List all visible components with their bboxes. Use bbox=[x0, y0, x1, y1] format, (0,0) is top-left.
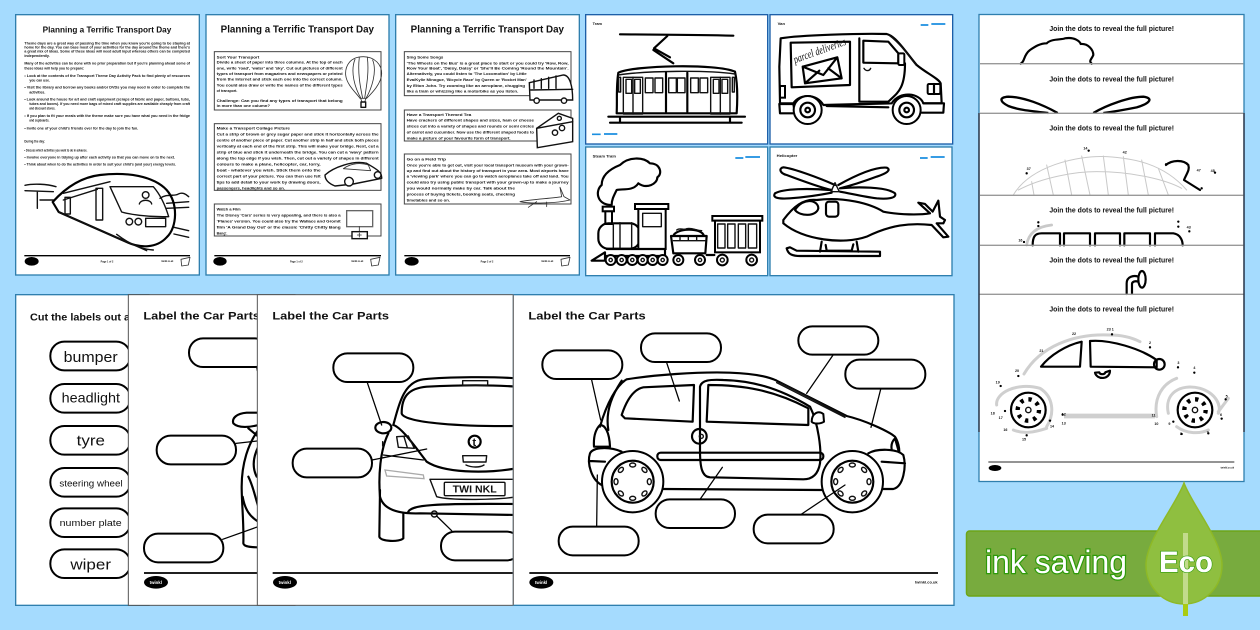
label: tram: Tram bbox=[593, 22, 603, 26]
heading: label the car parts: Label the Car Parts bbox=[272, 310, 389, 322]
footer: page b bbox=[144, 573, 263, 589]
panel: steam train colouring sheet bbox=[586, 147, 768, 276]
label: helicopter: Helicopter bbox=[777, 154, 798, 158]
dots and numbers: 13 bbox=[1062, 422, 1066, 426]
strip: balloon dots: 47 bbox=[1197, 169, 1201, 173]
dots and numbers: 12 bbox=[1062, 413, 1066, 417]
label pill: wiper bbox=[50, 549, 130, 578]
text block: page 1 introduction: • Look around the house for art and craft equipment (scraps of fabric and paper, buttons, tubs, bbox=[24, 97, 190, 102]
box: have a transport themed tea: Have crackers of different shapes and sizes, ham or cheese bbox=[407, 118, 535, 123]
page 2 footer bbox=[213, 256, 381, 266]
icon: cheese wedge bbox=[537, 113, 573, 148]
label pill: number plate bbox=[50, 508, 130, 537]
box: watch a film: Bang'. bbox=[217, 231, 227, 236]
box: sort your transport: one, write 'road', 'water' and 'sky'. Cut out pictures of different bbox=[217, 65, 343, 70]
dots and numbers: 6 bbox=[1220, 413, 1222, 417]
text block: page 1 introduction: Many of the activities can be done with no prior preparation but if you're planning ahead some of bbox=[24, 61, 191, 66]
strip: beetle car dots: Join the dots to reveal the full picture! bbox=[1049, 307, 1174, 314]
strip: pipe dots: Join the dots to reveal the full picture! bbox=[1049, 257, 1174, 264]
text block: page 1 introduction: independently. bbox=[24, 53, 50, 58]
text block: page 1 introduction: Theme days are a great way of passing the time when you know you're going to be staying at bbox=[24, 40, 191, 45]
label pill: tyre: tyre bbox=[77, 434, 105, 450]
box: sing some songs: Row Your Boat', 'Daisy, Daisy' or 'She'll Be Coming 'Round the Mountain'. bbox=[407, 66, 569, 71]
box: go on a field trip: could also try using public transport with your grown-up to make a journey bbox=[407, 180, 570, 185]
panel: join the dots sheets bbox=[979, 14, 1244, 482]
logo: steam sheet bbox=[735, 157, 760, 158]
label: steam train: Steam Train bbox=[593, 154, 616, 158]
text block: page 1 introduction: • Visit the library and borrow any books and/or DVDs you may need in order to complete the bbox=[24, 85, 191, 90]
panel: tram colouring sheet bbox=[586, 15, 768, 144]
page 3 footer: twinkl.co.uk bbox=[541, 259, 554, 263]
box: watch a film: Watch a Film bbox=[217, 206, 241, 211]
box: sing some songs: Eva/Kylie Minogue, 'Bicycle Race' by Queen or 'Rocket Man' bbox=[407, 77, 527, 82]
box: watch a film: film 'A Grand Day Out' or the classic 'Chitty Chitty Bang bbox=[217, 224, 341, 229]
beetle sheet footer bbox=[988, 462, 1234, 471]
box: go on a field trip: Once you're able to get out, visit your local transport museum with your grown- bbox=[407, 162, 569, 167]
box: have a transport themed tea: Have a Transport Themed Tea bbox=[407, 112, 472, 117]
dots and numbers: 11 bbox=[1152, 414, 1156, 418]
box: make a transport collage picture: boat - whatever you wish. Stick them onto the bbox=[217, 168, 322, 173]
dots and numbers: 3 bbox=[1177, 361, 1179, 365]
sign text: parcel deliveries: parcel deliveries bbox=[791, 36, 848, 66]
icon: car front fragment bbox=[233, 413, 260, 547]
box: sort your transport bbox=[214, 52, 382, 110]
strip: balloon dots: Join the dots to reveal the full picture! bbox=[1049, 125, 1174, 132]
page 2 footer: Page 1 of 2 bbox=[290, 260, 303, 264]
strip: pipe dots bbox=[1049, 257, 1174, 294]
wheel bolts: front bbox=[834, 463, 871, 500]
text block: page 1 introduction: During the day: bbox=[24, 139, 45, 144]
box: make a transport collage picture: strip of blue and stick it underneath the bridge. You can cut a 'wavy' pattern bbox=[217, 149, 379, 154]
label pill: bumper bbox=[50, 342, 130, 370]
strip: balloon dots: 42 bbox=[1123, 151, 1127, 155]
box: make a transport collage picture bbox=[214, 124, 382, 190]
box: sort your transport: in more than one column? bbox=[217, 103, 271, 108]
heading: page 2 title: Planning a Terrific Transport Day bbox=[221, 24, 374, 35]
box: have a transport themed tea: slices cut into a variety of shapes and rounds or semi circles bbox=[407, 123, 535, 128]
panel: cut the labels sheet bbox=[16, 295, 149, 605]
dots and numbers: 21 bbox=[1039, 349, 1043, 353]
dots and numbers: 10 bbox=[1154, 422, 1158, 426]
label pill: steering wheel: steering wheel bbox=[59, 478, 123, 488]
text block: page 1 introduction: these ideas will help you to prepare: bbox=[24, 65, 84, 70]
box: sing some songs: Alternatively, you could listen to 'The Locomotion' by Little bbox=[407, 71, 528, 76]
strip: bus dots: Join the dots to reveal the full picture! bbox=[1049, 207, 1174, 214]
box: go on a field trip: a 'viewing park' where you can go to watch aeroplanes take off and land. You bbox=[407, 174, 569, 179]
box: make a transport collage picture: along the top edge if you wish. Then, cut out a variety of shapes in different bbox=[217, 155, 379, 160]
box: sing some songs: Sing Some Songs bbox=[407, 54, 444, 59]
dots and numbers: 8 bbox=[1180, 432, 1182, 436]
text block: page 1 introduction: • Look at the contents of the Transport Theme Day Activity Pack to find plenty of resources bbox=[24, 73, 191, 78]
text block: page 1 introduction: a great mix of ideas. Some of these ideas will need adult input whereas others can be completed bbox=[24, 49, 191, 54]
box: go on a field trip: Go on a Field Trip bbox=[407, 156, 447, 161]
page 3 footer: Page 2 of 2 bbox=[481, 260, 494, 264]
footer: page d: twinkl bbox=[535, 580, 547, 585]
text block: page 1 introduction bbox=[24, 40, 191, 167]
logo: tram sheet bbox=[592, 131, 617, 137]
panel: label the car parts side view bbox=[513, 295, 954, 605]
dots and numbers: 15 bbox=[1022, 438, 1026, 442]
box: sort your transport: Challenge: Can you find any types of transport that belong bbox=[217, 98, 343, 103]
panel: label the car parts rear view bbox=[257, 295, 521, 605]
box: go on a field trip bbox=[404, 154, 571, 207]
footer: page c bbox=[273, 573, 515, 589]
label pill: headlight: headlight bbox=[62, 390, 120, 406]
box: make a transport collage picture: Cut a strip of brown or grey sugar paper and stick it horizontally across the bbox=[217, 131, 380, 136]
page 2 footer: twinkl.co.uk bbox=[351, 259, 364, 263]
footer: page c: twinkl bbox=[279, 580, 291, 585]
text block: page 1 introduction: and discount stores. bbox=[29, 105, 55, 110]
panel: helicopter colouring sheet bbox=[770, 147, 952, 276]
beetle sheet footer: twinkl.co.uk bbox=[1221, 466, 1234, 470]
text: eco: Eco bbox=[1159, 546, 1213, 579]
page 1 footer bbox=[24, 256, 190, 266]
icon: delivery van bbox=[779, 34, 944, 124]
illustration: high speed train bbox=[25, 174, 189, 251]
strip: balloon dots: 14 bbox=[1083, 146, 1088, 150]
box: make a transport collage picture: tips to add detail to your work by drawing doors, bbox=[217, 180, 321, 185]
box: sing some songs bbox=[404, 52, 573, 103]
number plate text: TWI NKL bbox=[453, 485, 497, 496]
heading: label the car parts: Label the Car Parts bbox=[528, 310, 646, 322]
dots and numbers: 17 bbox=[999, 416, 1003, 420]
dots and numbers: 7 bbox=[1207, 430, 1209, 434]
icon: sports car bbox=[325, 163, 382, 186]
icon: car side bbox=[589, 372, 905, 512]
box: make a transport collage picture: centre of another piece of paper. Cut another strip in half and stick both pieces bbox=[217, 137, 379, 142]
dots and numbers: 4 bbox=[1193, 366, 1196, 370]
heading: page 3 title: Planning a Terrific Transport Day bbox=[411, 24, 564, 35]
box: sort your transport: You could also draw or write the names of the different types bbox=[217, 82, 344, 87]
strip: balloon dots: 48 bbox=[1211, 169, 1215, 173]
dots and numbers: 5 bbox=[1226, 395, 1228, 399]
box: have a transport themed tea: of carrot and cucumber. Now use the different shaped foods to bbox=[407, 129, 535, 134]
dots and numbers: 22 bbox=[1072, 332, 1076, 336]
page 3 footer bbox=[404, 256, 570, 266]
strip: bus dots: 43 bbox=[1187, 226, 1191, 230]
label: van: Van bbox=[778, 22, 785, 26]
icon: car rear: t bbox=[472, 437, 476, 449]
box: make a transport collage picture: colours to make a plane, helicopter, car, lorry, bbox=[217, 162, 321, 167]
icon: aeroplane bbox=[520, 187, 570, 207]
text block: page 1 introduction: tubes and boxes). If you need more bags of mixed craft supplies are available cheaply from craft bbox=[29, 101, 191, 106]
box: have a transport themed tea: make a picture of your favourite form of transport. bbox=[407, 135, 511, 140]
text block: page 1 introduction: home for the day. You can base most of your activities for the day around the theme and there's bbox=[24, 44, 191, 49]
text block: page 1 introduction: • Invite one of your child's friends over for the day to join the fun. bbox=[24, 125, 138, 130]
strip: rotor dots: Join the dots to reveal the full picture! bbox=[1049, 76, 1174, 83]
label pill: number plate: number plate bbox=[60, 518, 122, 528]
blank label pills with leader lines bbox=[542, 326, 925, 555]
box: sort your transport: Sort Your Transport bbox=[217, 54, 260, 59]
label pill: wiper: wiper bbox=[69, 557, 111, 573]
box: sort your transport: from the Internet and stick each one into the correct column. bbox=[217, 77, 343, 82]
page 1 footer: Page 1 of 2 bbox=[101, 260, 114, 264]
label pill: headlight bbox=[50, 384, 130, 413]
panel: activity page 2 bbox=[206, 15, 389, 275]
blank label pills bbox=[293, 353, 521, 560]
dots and numbers bbox=[991, 328, 1228, 442]
icon: green leaf drop bbox=[1146, 483, 1222, 616]
label pill: steering wheel bbox=[50, 468, 130, 497]
box: sing some songs: by Elton John. Try zooming like an aeroplane, chugging bbox=[407, 83, 526, 88]
footer: page d: twinkl.co.uk bbox=[915, 581, 939, 585]
icon: double decker bus bbox=[529, 75, 573, 103]
box: go on a field trip: process of buying tickets, booking seats, checking bbox=[407, 191, 516, 196]
box: watch a film bbox=[214, 204, 381, 239]
footer: page d bbox=[529, 573, 939, 589]
icon: car rear bbox=[375, 377, 517, 541]
box: sing some songs: like a train or whizzing like a motorbike as you listen. bbox=[407, 88, 518, 93]
box: watch a film: 'Planes' version. You could also try the Wallace and Gromit bbox=[217, 218, 341, 223]
badge: eco ink saving banner bbox=[966, 483, 1260, 616]
box: have a transport themed tea bbox=[404, 110, 573, 148]
dots and numbers: 9 bbox=[1168, 422, 1170, 426]
box: sort your transport: of transport. bbox=[217, 88, 237, 93]
icon: beetle car bbox=[997, 335, 1228, 433]
dots and numbers: 19 bbox=[996, 381, 1000, 385]
logo: helicopter sheet bbox=[920, 157, 945, 158]
icon: steam train bbox=[592, 159, 762, 265]
dots and numbers: 23 1 bbox=[1107, 328, 1114, 332]
strip: bus dots bbox=[980, 207, 1243, 245]
box: make a transport collage picture: correct part of your picture. You can then use felt bbox=[217, 174, 321, 179]
box: sort your transport: Divide a sheet of paper into three columns. At the top of each bbox=[217, 60, 343, 65]
strip: balloon dots: 37 bbox=[1027, 167, 1031, 171]
blank label pills bbox=[144, 338, 269, 562]
wheel bolts: rear bbox=[614, 463, 651, 500]
page 1 footer: twinkl.co.uk bbox=[161, 259, 174, 263]
logo: van sheet bbox=[921, 21, 945, 27]
strip: balloon dots bbox=[980, 125, 1243, 195]
panel: activity page 1 bbox=[16, 15, 199, 275]
box: watch a film: The Disney 'Cars' series is very appealing, and there is also a bbox=[217, 212, 341, 217]
dots and numbers: 14 bbox=[1050, 424, 1055, 428]
heading: label the car parts: Label the Car Parts bbox=[143, 310, 260, 322]
footer: page b: twinkl bbox=[150, 580, 162, 585]
heading: cut the labels: Cut the labels out and bbox=[30, 313, 143, 324]
strip: rotor dots bbox=[980, 76, 1243, 113]
box: go on a field trip: up and find out about the history of transport in your area. Most airports have bbox=[407, 168, 570, 173]
strip: cloud dots bbox=[980, 26, 1243, 64]
box: go on a field trip: timetables and so on. bbox=[407, 197, 450, 202]
text block: page 1 introduction: activities. bbox=[29, 89, 45, 94]
panel: activity page 3 bbox=[396, 15, 579, 275]
icon: tram bbox=[608, 34, 745, 123]
box: make a transport collage picture: Make a Transport Collage Picture bbox=[217, 126, 291, 131]
icon: hot air balloon bbox=[346, 57, 382, 107]
dots and numbers: 18 bbox=[991, 412, 995, 416]
strip: beetle car dots bbox=[979, 294, 1244, 471]
text block: page 1 introduction: • Involve everyone in tidying up after each activity so that you can move on to the next. bbox=[24, 154, 175, 159]
icon: helicopter bbox=[774, 167, 948, 256]
text block: page 1 introduction: and cupboards. bbox=[29, 117, 49, 122]
strip: cloud dots: Join the dots to reveal the full picture! bbox=[1049, 26, 1174, 33]
label pill: tyre bbox=[50, 426, 130, 455]
dots and numbers: 2 bbox=[1149, 341, 1151, 345]
strip: bus dots: 16 bbox=[1018, 238, 1022, 242]
box: sort your transport: types of transport from magazines and newspapers or printed bbox=[217, 71, 343, 76]
box: make a transport collage picture: passengers, headlights and so on. bbox=[217, 185, 285, 190]
box: go on a field trip: you would normally make by car. Talk about the bbox=[407, 185, 516, 190]
text block: page 1 introduction: • Discuss which activities you want to do in advance. bbox=[24, 147, 87, 152]
panel: van colouring sheet bbox=[770, 15, 953, 144]
text: ink saving: ink saving bbox=[985, 544, 1127, 580]
dots and numbers: 16 bbox=[1003, 428, 1007, 432]
box: sing some songs: 'The Wheels on the Bus' is a great place to start or you could try 'Row, Row, bbox=[407, 60, 569, 65]
text block: page 1 introduction: you can use. bbox=[29, 77, 50, 82]
label pill: bumper: bumper bbox=[64, 350, 118, 366]
dots and numbers: 20 bbox=[1015, 369, 1019, 373]
text block: page 1 introduction: • If you plan to fit your meals with the theme make sure you have what you need in the fridge bbox=[24, 113, 191, 118]
panel: label the car parts front view bbox=[128, 295, 295, 605]
text block: page 1 introduction: • Think about when to do the activities in order to suit your child's (and your) energy levels. bbox=[24, 162, 176, 167]
heading: page 1 title: Planning a Terrific Transport Day bbox=[43, 24, 171, 34]
icon: television bbox=[347, 211, 373, 239]
box: make a transport collage picture: vertically at each end of the first strip. This will make your bridge. Next, cut a bbox=[217, 143, 380, 148]
